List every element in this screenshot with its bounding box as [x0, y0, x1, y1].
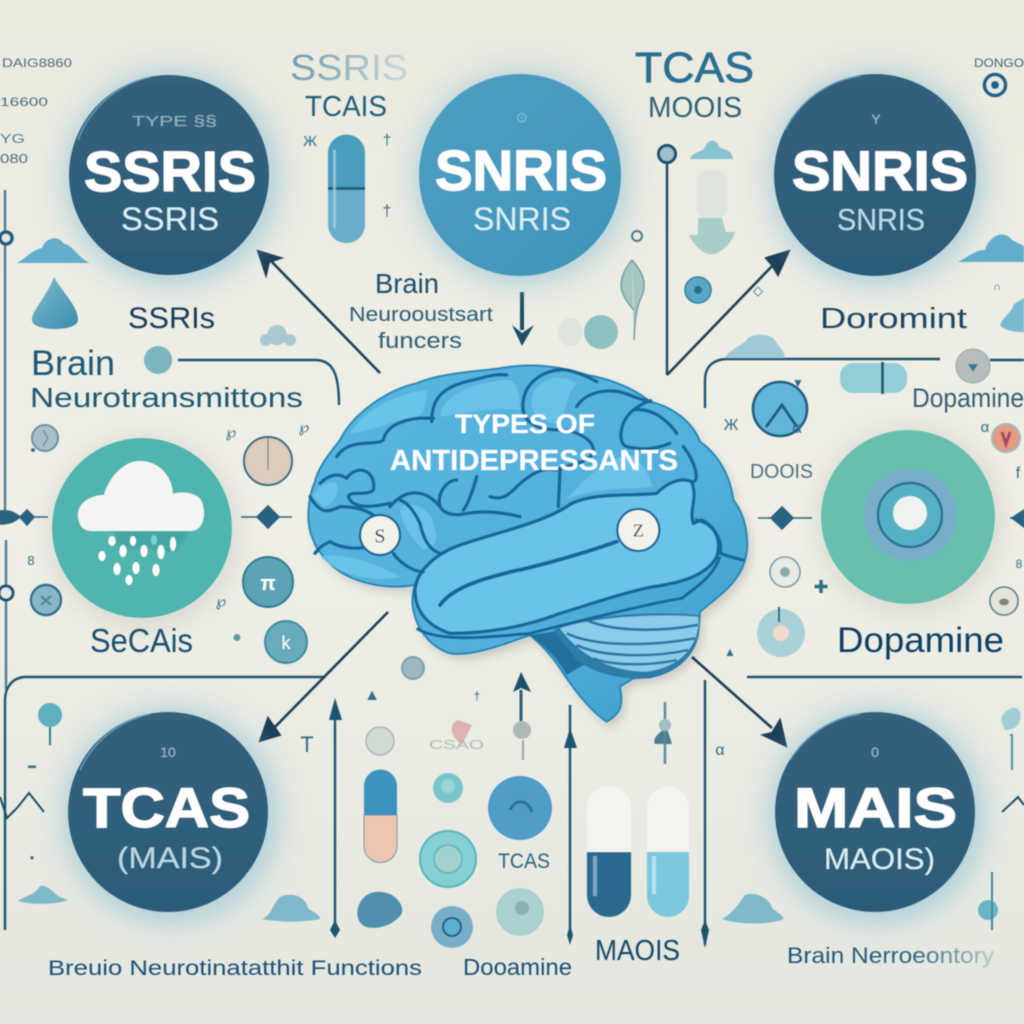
circle: SNRIS centre	[414, 70, 630, 286]
vertical arrow centre	[564, 705, 577, 945]
title: types of antidepressants	[390, 409, 678, 477]
labels: CSAO	[429, 737, 484, 752]
labels: SSRIs	[128, 302, 215, 335]
small decorative glyphs: ℘	[299, 419, 309, 436]
circle: TCAS: TCAS	[83, 776, 250, 839]
small decorative glyphs: α	[715, 742, 725, 759]
pill: blue and peach capsule	[364, 770, 397, 862]
neuron node S: S	[374, 525, 386, 547]
small decorative glyphs: T	[300, 732, 314, 757]
labels: Brain	[31, 344, 115, 383]
circle: SNRIS right: SNRIS	[792, 139, 968, 202]
circle: SNRIS centre: SNRIS	[435, 139, 607, 203]
labels: DONGO	[974, 56, 1024, 70]
arrow: brain to TCAS	[260, 612, 388, 741]
labels: Dooamine	[463, 954, 572, 980]
circle: MAIS	[769, 707, 985, 923]
circle: SNRIS centre: SNRIS	[473, 201, 571, 237]
small decorative glyphs: α	[792, 418, 802, 437]
labels: MAOIS	[595, 935, 680, 967]
sulci	[310, 370, 743, 605]
pill: top blue capsule	[328, 134, 365, 243]
labels: Neurotransmittons	[30, 382, 303, 413]
small decorative glyphs: ●	[232, 629, 242, 646]
title: types of antidepressants: ANTIDEPRESSANTS	[390, 445, 678, 477]
pill: faded capsule and arrow	[689, 170, 735, 254]
neuron node S	[360, 515, 400, 555]
neuron node Z	[617, 509, 659, 551]
small decorative glyphs: ▲	[724, 645, 736, 659]
small decorative glyphs: ▼	[792, 376, 804, 390]
small icon circles: k	[282, 633, 292, 653]
small decorative glyphs: ℘	[226, 424, 236, 441]
circle: SSRIS: SSRIS	[121, 201, 219, 237]
brain illustration	[308, 366, 751, 728]
pill: white and dark capsule	[587, 786, 631, 917]
arrow: down to brain	[512, 292, 534, 346]
labels: Brain	[375, 268, 439, 299]
title: types of antidepressants: TYPES OF	[455, 409, 595, 439]
labels: TCAS	[635, 44, 754, 92]
temporal lobe	[415, 480, 719, 633]
small decorative glyphs: 8	[1016, 557, 1023, 571]
labels: TCAIS	[305, 91, 387, 123]
circle: MAIS: MAOIS)	[824, 843, 935, 876]
circle: SNRIS right	[769, 70, 985, 286]
connector lines	[0, 160, 1024, 930]
small decorative glyphs: †	[474, 689, 480, 703]
small decorative glyphs: Ж	[724, 417, 739, 434]
labels: DOOIS	[750, 461, 813, 483]
small decorative glyphs: ●	[30, 853, 35, 862]
labels: funcers	[378, 328, 462, 353]
labels: 080	[0, 151, 28, 166]
vertical arrow left of pills	[329, 698, 342, 938]
circle: rain cloud	[52, 438, 236, 624]
diamond connectors	[0, 506, 1024, 529]
icon: water drop	[32, 277, 78, 329]
circle: SSRIS: SSRIS	[84, 140, 256, 204]
labels: Doromint	[820, 303, 967, 335]
circle: SNRIS right: SNRIS	[837, 202, 925, 237]
labels: TCAS	[498, 850, 550, 873]
small decorative glyphs: †	[383, 203, 391, 220]
pill: horizontal teal capsule	[840, 362, 907, 394]
arrow: brain to MAIS	[692, 657, 786, 746]
labels: SeCAis	[90, 622, 193, 659]
neuron node Z: Z	[633, 521, 644, 541]
small decorative glyphs: α	[981, 419, 990, 436]
small decorative glyphs	[27, 132, 1023, 862]
circle: target ring	[820, 430, 1000, 610]
vertical arrow right of pills	[701, 680, 709, 948]
clouds	[17, 141, 1024, 923]
arrow: brain to SSRIS	[258, 251, 380, 373]
small decorative glyphs: ▲	[364, 687, 380, 704]
labels: Neurooustsart	[349, 304, 493, 326]
small decorative glyphs: 8	[27, 553, 35, 568]
brain stem shadow	[530, 630, 587, 675]
small decorative glyphs: ◇	[753, 283, 763, 298]
small decorative glyphs: †	[383, 132, 391, 149]
circle: MAIS: 0	[871, 744, 879, 760]
small decorative glyphs: Ж	[303, 133, 317, 150]
pill: white and light blue capsule	[647, 787, 689, 917]
small icon circles: π	[260, 573, 276, 595]
circle: TCAS: 10	[160, 744, 176, 760]
arrow: brain to SNRIS	[667, 251, 789, 375]
labels: YG	[0, 131, 25, 146]
small decorative glyphs: •	[30, 442, 36, 459]
labels: MOOIS	[648, 92, 742, 124]
small decorative glyphs: ℘	[216, 593, 226, 610]
small decorative glyphs: ∩	[993, 281, 1001, 293]
circle: TCAS: (MAIS)	[117, 842, 223, 875]
small decorative glyphs: ▬	[28, 761, 36, 770]
labels: Brain Nerroeontory	[787, 943, 994, 968]
arrow: up from brain	[513, 672, 531, 735]
labels: 16600	[0, 95, 48, 109]
lobe highlights	[313, 378, 653, 579]
circle: SSRIS: TYPE §§	[132, 113, 217, 130]
small decorative glyphs: f	[1016, 465, 1021, 482]
circle: TCAS	[63, 707, 279, 923]
circle: MAIS: MAIS	[794, 776, 957, 839]
cerebellum	[553, 613, 699, 679]
labels: DAIG8860	[2, 56, 72, 70]
labels: SSRIS	[290, 47, 408, 88]
labels: Breuio Neurotinatatthit Functions	[48, 957, 422, 980]
circle: SSRIS	[64, 70, 280, 286]
small decorative glyphs: ✚	[813, 577, 829, 597]
labels: Dopamine	[837, 621, 1004, 660]
circle: SNRIS right: Y	[871, 111, 881, 127]
circle: SNRIS centre: ⊙	[516, 109, 528, 125]
